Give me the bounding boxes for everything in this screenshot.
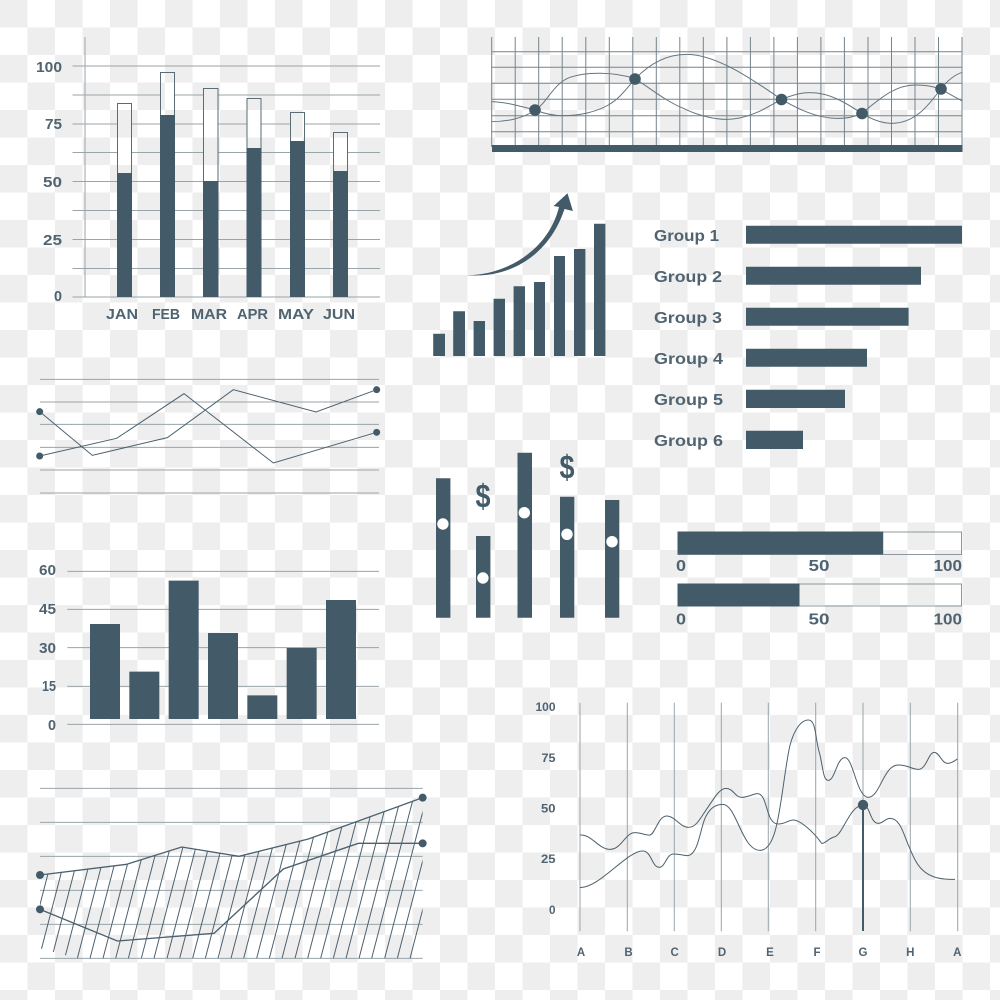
stacked bar chart: monthly values <box>36 37 380 323</box>
horizontal bar chart: groups: Group 2 <box>654 269 722 286</box>
column chart axis labels: 30 <box>39 640 56 657</box>
column chart: seven bars <box>67 571 379 724</box>
stacked bar chart: monthly values: MAR <box>191 306 227 323</box>
smooth line chart with marker: G <box>859 947 868 959</box>
dollar range bars <box>436 448 619 618</box>
horizontal bar chart: groups: Group 3 <box>654 310 722 327</box>
stacked bar chart: monthly values: 25 <box>43 232 62 249</box>
column chart axis labels <box>39 562 56 734</box>
progress bars: 50 <box>808 612 830 628</box>
smooth line chart with marker <box>536 702 961 959</box>
horizontal bar chart: groups: Group 6 <box>654 433 723 450</box>
smooth line chart with marker: A <box>577 947 585 959</box>
stacked bar chart: monthly values: JAN <box>106 306 138 323</box>
smooth line chart with marker: 0 <box>549 905 556 917</box>
stacked bar chart: monthly values: 50 <box>43 174 62 191</box>
smooth line chart with marker: C <box>671 947 679 959</box>
dollar range bars: $ <box>560 448 574 486</box>
column chart axis labels: 60 <box>39 562 56 579</box>
growth bar chart with rising arrow <box>433 193 605 356</box>
smooth line chart with marker: 25 <box>541 854 556 866</box>
progress bars: 0 <box>676 612 686 628</box>
dollar range bars: $ <box>476 478 490 514</box>
stacked bar chart: monthly values: 75 <box>45 116 62 133</box>
smooth line chart with marker: A <box>953 947 961 959</box>
stacked bar chart: monthly values: APR <box>237 306 268 323</box>
smooth line chart with marker: E <box>766 947 774 959</box>
column chart axis labels: 0 <box>48 717 56 734</box>
column chart axis labels: 45 <box>39 601 56 618</box>
line chart: two series <box>36 379 380 493</box>
horizontal bar chart: groups: Group 5 <box>654 392 723 409</box>
stacked bar chart: monthly values: 100 <box>36 59 62 76</box>
progress bars <box>676 532 962 628</box>
smooth line chart with marker: H <box>906 947 914 959</box>
smooth line chart with marker: 100 <box>536 702 556 714</box>
horizontal bar chart: groups: Group 4 <box>654 351 723 368</box>
progress bars: 100 <box>934 558 962 575</box>
stacked bar chart: monthly values: FEB <box>152 306 180 323</box>
horizontal bar chart: groups: Group 1 <box>654 228 719 245</box>
smooth line chart with marker: B <box>624 947 633 959</box>
column chart axis labels: 15 <box>42 678 56 695</box>
stacked bar chart: monthly values: MAY <box>278 306 314 323</box>
stacked bar chart: monthly values: 0 <box>54 288 62 305</box>
stacked bar chart: monthly values: JUN <box>323 306 355 323</box>
wave line chart on grid <box>492 37 962 152</box>
smooth line chart with marker: D <box>718 947 726 959</box>
smooth line chart with marker: F <box>813 947 821 959</box>
smooth line chart with marker: 75 <box>542 753 556 765</box>
icon: rising arrow <box>466 193 573 275</box>
horizontal bar chart: groups <box>654 226 962 450</box>
progress bars: 50 <box>808 558 830 575</box>
hatched area line chart <box>26 788 453 958</box>
progress bars: 0 <box>676 558 686 575</box>
smooth line chart with marker: 50 <box>541 804 556 816</box>
progress bars: 100 <box>934 612 962 628</box>
